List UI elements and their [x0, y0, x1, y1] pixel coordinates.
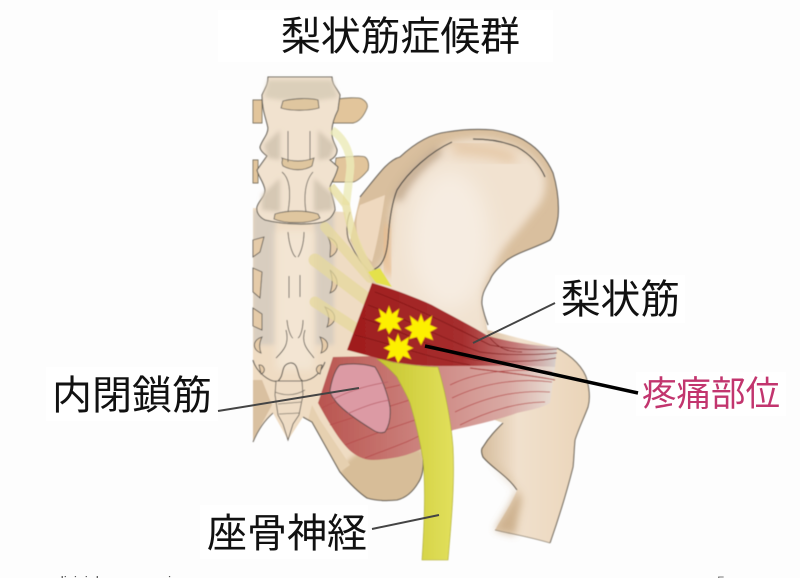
leader line: sciatic nerve: [372, 515, 439, 529]
pain points: three yellow stars: [375, 306, 437, 363]
ilium bone: [350, 129, 558, 345]
sacrum, sacroiliac joint and ischium: [252, 208, 424, 502]
leader line: pain site: [425, 346, 638, 393]
obturator internus: [330, 364, 390, 433]
label: pain site: 疼痛部位: [642, 375, 780, 414]
nerve roots: [315, 130, 392, 330]
lumbar vertebrae: [253, 77, 369, 224]
leader line: piriformis: [473, 303, 555, 343]
illustration: pelvis anatomy: [253, 77, 589, 560]
title: [218, 10, 553, 62]
label: obturator internus: 内閉鎖筋: [52, 374, 212, 418]
femur bone: [470, 330, 589, 543]
label: piriformis: 梨状筋: [561, 278, 680, 322]
lower external rotator muscles: [318, 356, 555, 460]
label: sciatic nerve: 座骨神経: [207, 512, 367, 556]
leader line: obturator internus: [218, 388, 359, 411]
piriformis muscle: [347, 283, 557, 380]
sciatic nerve: [377, 359, 454, 560]
title: 梨状筋症候群: [281, 15, 520, 59]
